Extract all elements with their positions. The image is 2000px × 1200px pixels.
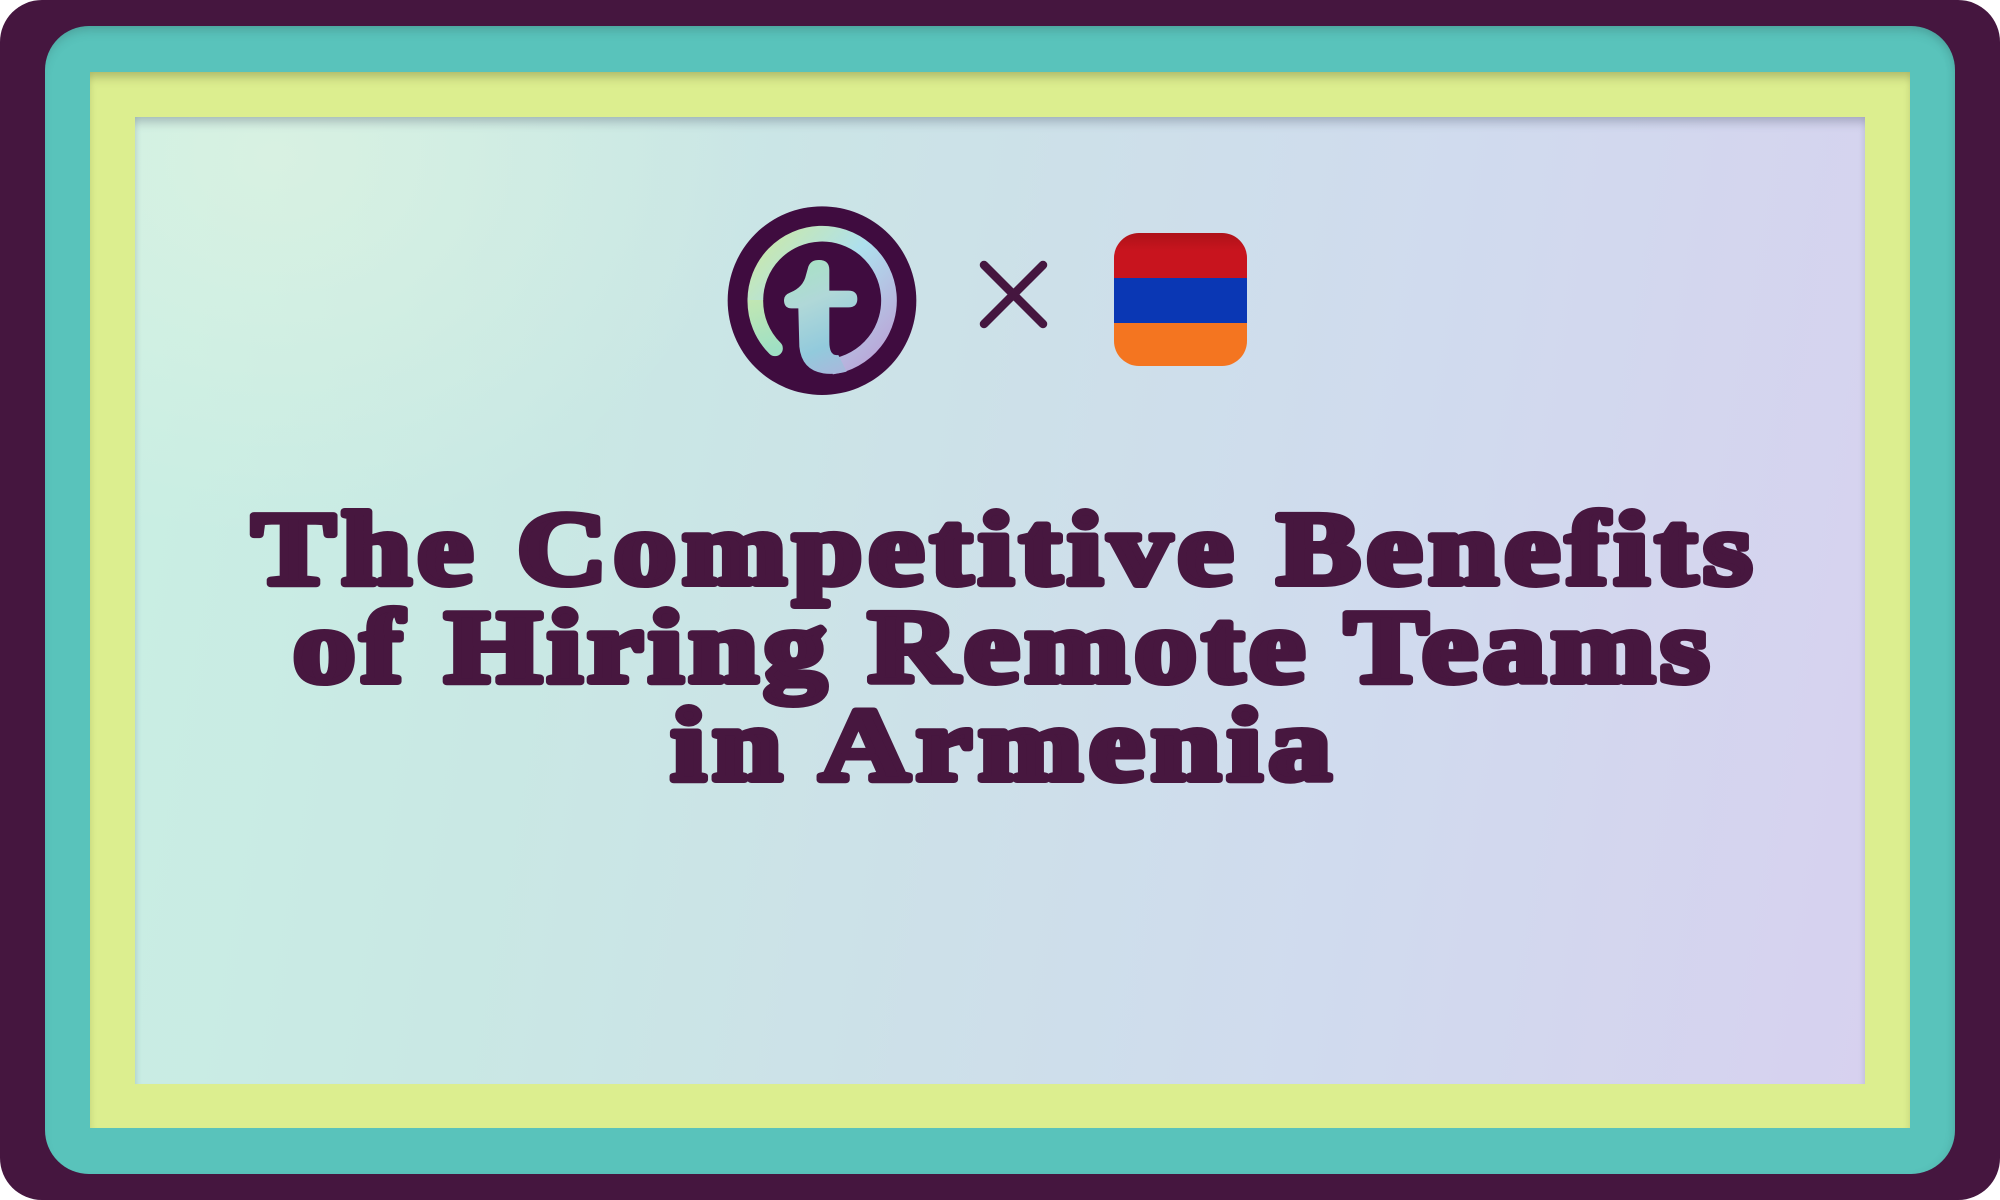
title: The Competitive Benefits xyxy=(252,491,1752,606)
icon: company logo xyxy=(728,206,916,395)
gradient content panel xyxy=(135,117,1865,1084)
icon: multiply sign xyxy=(984,265,1043,324)
title: of Hiring Remote Teams xyxy=(293,589,1709,704)
title xyxy=(252,491,1752,802)
icon: Armenian flag xyxy=(1114,233,1247,366)
title: in Armenia xyxy=(671,687,1331,802)
